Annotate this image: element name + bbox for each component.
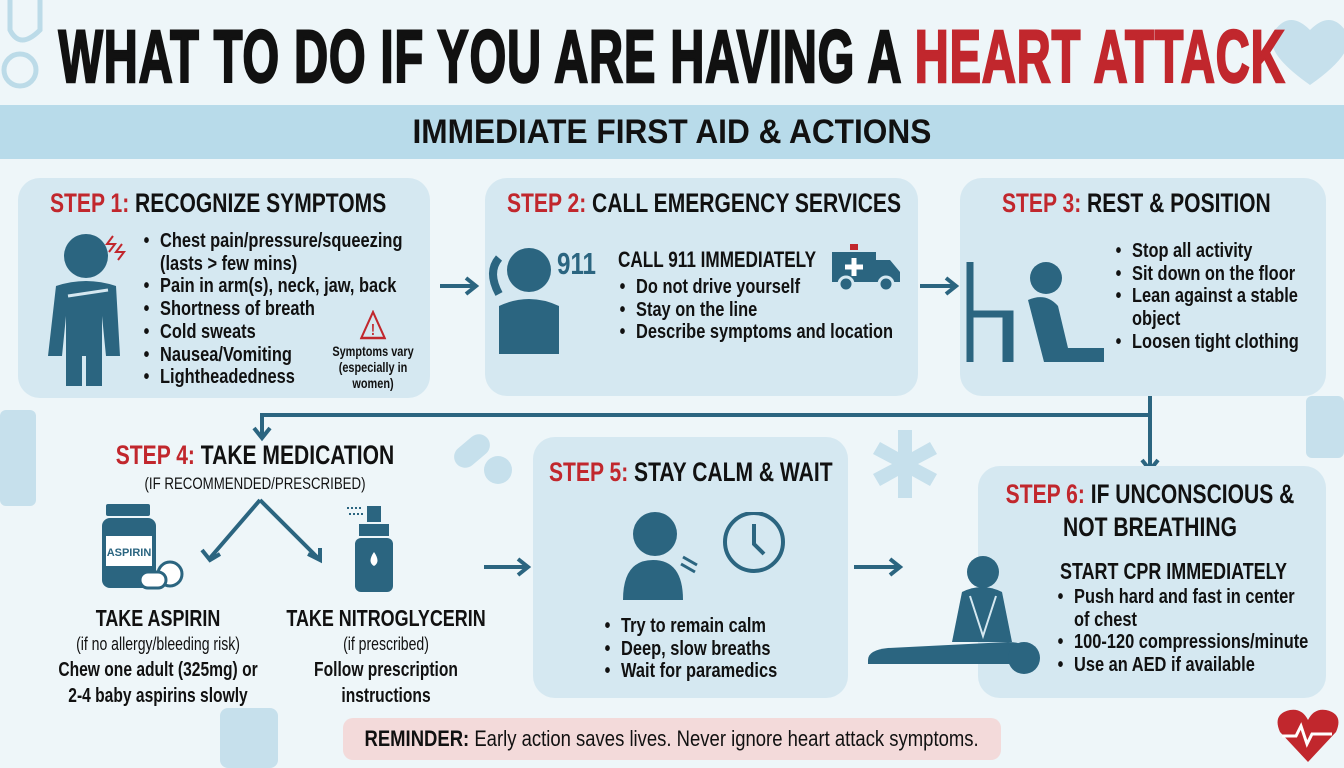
panel: step 6: Use an AED if available xyxy=(1074,654,1255,676)
symptom list: Pain in arm(s), neck, jaw, back xyxy=(160,275,396,297)
symptom list: Shortness of breath xyxy=(160,298,315,320)
panel: step 3: Loosen tight clothing xyxy=(1132,331,1299,353)
panel: step 2: Do not drive yourself xyxy=(636,276,800,298)
panel: step 6: STEP 6: IF UNCONSCIOUS & xyxy=(1006,479,1294,509)
banner xyxy=(0,105,1344,159)
symptom list: Lightheadedness xyxy=(160,366,295,388)
panel: step 5 xyxy=(533,437,848,698)
icon: heart xyxy=(1278,710,1338,762)
panel: step 5: Try to remain calm xyxy=(621,615,766,637)
step 4: (IF RECOMMENDED/PRESCRIBED) xyxy=(144,474,366,493)
branch arrows xyxy=(200,498,322,564)
symptom list: Cold sweats xyxy=(160,321,256,343)
panel: step 6: Push hard and fast in center xyxy=(1074,586,1295,608)
panel: step 3 xyxy=(960,178,1326,396)
911 label: 911 xyxy=(557,246,596,281)
panel: step 3: Sit down on the floor xyxy=(1132,263,1295,285)
panel: step 2: CALL 911 IMMEDIATELY xyxy=(618,247,816,272)
panel: step 5: Wait for paramedics xyxy=(621,660,777,682)
icon: seated person xyxy=(966,262,1104,362)
icon: aspirin bottle: ASPIRIN xyxy=(107,547,151,559)
icon: person on phone xyxy=(488,248,559,354)
panel: step 2 xyxy=(485,178,918,396)
panel: step 2: Stay on the line xyxy=(636,299,757,321)
icon: ambulance xyxy=(832,244,900,290)
panel: step 6: 100-120 compressions/minute xyxy=(1074,631,1308,653)
icon: breathing person and clock xyxy=(623,512,785,600)
warning callout: Symptoms vary xyxy=(332,343,414,359)
connector arrows xyxy=(252,396,1160,466)
panel: step 6: NOT BREATHING xyxy=(1063,512,1237,542)
symptom list: Chest pain/pressure/squeezing xyxy=(160,230,402,252)
icon: aspirin bottle xyxy=(102,504,184,590)
warning callout xyxy=(332,310,414,391)
title: WHAT TO DO IF YOU ARE HAVING A HEART ATTACK xyxy=(59,15,1285,98)
warning callout: women) xyxy=(352,375,394,391)
panel: step 1: STEP 1: RECOGNIZE SYMPTOMS xyxy=(50,188,386,218)
step 4: Chew one adult (325mg) or xyxy=(58,659,258,681)
arrow 5-6 xyxy=(854,558,904,576)
step 4: STEP 4: TAKE MEDICATION xyxy=(116,440,394,470)
warning callout: (especially in xyxy=(339,359,407,375)
banner: IMMEDIATE FIRST AID & ACTIONS xyxy=(413,113,931,151)
panel: step 2: STEP 2: CALL EMERGENCY SERVICES xyxy=(507,188,901,218)
arrow 1-2 xyxy=(440,276,480,296)
icon: CPR xyxy=(868,556,1040,674)
icon: nitro spray xyxy=(347,506,393,592)
arrow 2-3 xyxy=(920,276,960,296)
panel: step 3: Stop all activity xyxy=(1132,240,1252,262)
panel: step 3: object xyxy=(1132,308,1180,330)
panel: step 1 xyxy=(18,178,430,398)
panel: step 6: START CPR IMMEDIATELY xyxy=(1060,558,1287,584)
warning callout: ! xyxy=(371,322,375,339)
step 4: Follow prescription xyxy=(314,659,458,681)
panel: step 5: STEP 5: STAY CALM & WAIT xyxy=(549,457,833,487)
step 4: TAKE ASPIRIN xyxy=(96,605,220,631)
step 4: TAKE NITROGLYCERIN xyxy=(286,605,486,631)
panel: step 6: of chest xyxy=(1074,609,1137,631)
panel: step 3: STEP 3: REST & POSITION xyxy=(1002,188,1271,218)
panel: step 6 xyxy=(978,466,1326,698)
reminder xyxy=(343,718,1001,760)
symptom list xyxy=(144,230,402,388)
step 4 xyxy=(58,440,486,707)
symptom list: (lasts > few mins) xyxy=(160,253,297,275)
reminder: REMINDER: Early action saves lives. Never ignore heart attack symptoms. xyxy=(365,726,979,751)
step 4: (if no allergy/bleeding risk) xyxy=(76,634,240,654)
panel: step 2: Describe symptoms and location xyxy=(636,321,893,343)
step 4: 2-4 baby aspirins slowly xyxy=(68,685,248,707)
step 4: instructions xyxy=(341,685,431,707)
arrow 4-5 xyxy=(484,558,532,576)
step 4: (if prescribed) xyxy=(343,634,429,654)
panel: step 3: Lean against a stable xyxy=(1132,285,1298,307)
panel: step 5: Deep, slow breaths xyxy=(621,638,771,660)
icon: person clutching chest xyxy=(48,234,126,386)
symptom list: Nausea/Vomiting xyxy=(160,344,292,366)
